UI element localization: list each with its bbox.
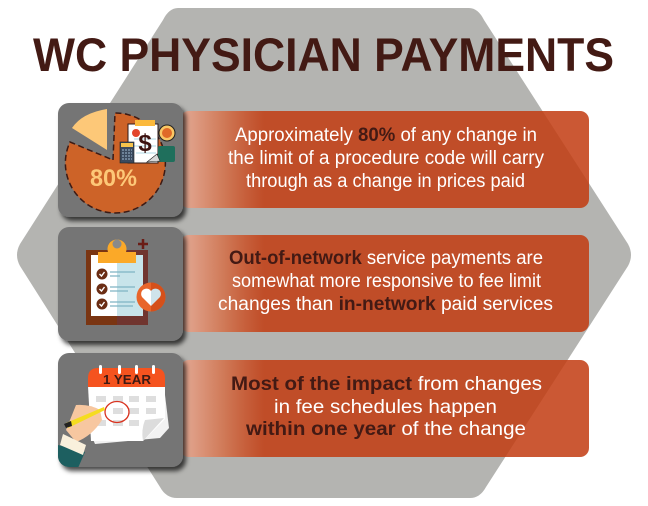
text block: Out-of-network service payments are	[229, 248, 543, 269]
calendar label: 1 YEAR	[103, 372, 152, 387]
panel: one year: within one year of the change	[245, 419, 526, 440]
icon: heart badge	[136, 282, 166, 312]
panel: out-of-network: somewhat more responsive to fee limit	[232, 271, 542, 292]
text block: Most of the impact from changes	[231, 374, 542, 395]
panel: out-of-network	[58, 227, 589, 341]
panel: price change: the limit of a procedure code will carry	[228, 148, 544, 169]
icon tile: clipboard	[58, 227, 183, 341]
icon: hand with marker	[58, 405, 105, 468]
panel: price change	[58, 103, 589, 217]
panel: price change: through as a change in prices paid	[246, 171, 525, 192]
panel: one year	[58, 353, 589, 468]
bar	[180, 111, 589, 208]
icon tile: pie chart	[58, 103, 183, 217]
text block: Approximately 80% of any change in	[235, 125, 537, 146]
bar	[180, 360, 589, 457]
bar	[180, 235, 589, 332]
icon: medical bill: $	[138, 130, 152, 157]
icon tile: pie chart: 80%	[90, 165, 137, 192]
panel: one year: in fee schedules happen	[274, 397, 497, 418]
icon tile: calendar	[58, 353, 183, 468]
panel: out-of-network: changes than in-network paid services	[218, 294, 553, 315]
title: WC PHYSICIAN PAYMENTS	[33, 28, 614, 81]
